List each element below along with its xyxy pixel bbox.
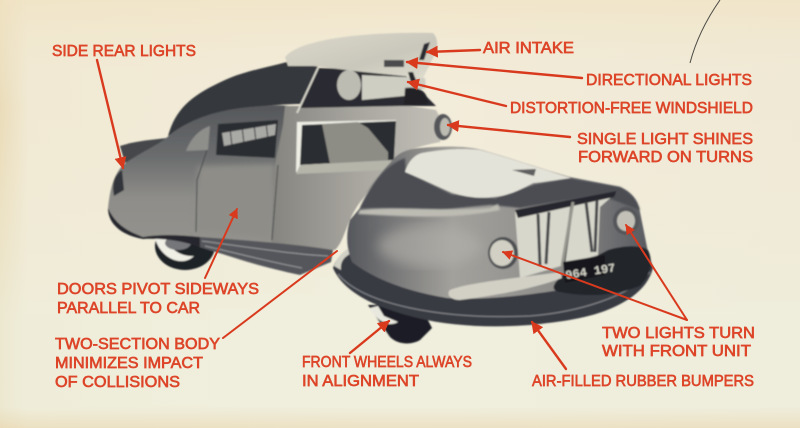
- hood ornament: [512, 169, 536, 176]
- label: front wheels: IN ALIGNMENT: [302, 373, 420, 390]
- front dark shoulder: [360, 158, 640, 210]
- white hood panel: [405, 149, 571, 198]
- arrow: left lamp: [503, 252, 687, 320]
- dark rear roof: [168, 62, 318, 136]
- label: two-section body: OF COLLISIONS: [55, 374, 180, 391]
- line: two-section body: [223, 251, 337, 338]
- label: side rear lights: SIDE REAR LIGHTS: [52, 43, 196, 60]
- label: front wheels: [302, 354, 472, 390]
- arrow: air intake: [427, 50, 480, 52]
- label: air intake: AIR INTAKE: [483, 40, 574, 57]
- licence plate: 964 197: [564, 261, 616, 283]
- rear body section: [108, 105, 335, 274]
- label: two lights: WITH FRONT UNIT: [602, 343, 752, 360]
- label: doors pivot: [57, 281, 259, 317]
- front unit body: [347, 147, 648, 299]
- rear wheel: [155, 222, 215, 270]
- arrow: right lamp: [626, 225, 687, 320]
- left front lamp: [488, 237, 518, 269]
- windshield opening with passenger: [297, 68, 436, 113]
- canopy details: [384, 42, 430, 86]
- right front lamp: [613, 207, 639, 235]
- thin pen line at top right: [690, 0, 720, 63]
- arrow: rubber bumpers: [532, 322, 566, 369]
- soft body sheen: [378, 226, 482, 266]
- chrome left end of skirt: [334, 248, 350, 270]
- arrow: side rear lights: [97, 60, 123, 168]
- label: doors pivot: PARALLEL TO CAR: [57, 300, 200, 317]
- label: directional lights: DIRECTIONAL LIGHTS: [586, 72, 752, 89]
- white canopy: [285, 33, 437, 78]
- mid body section: [271, 106, 446, 250]
- grille opening: [515, 191, 617, 278]
- bumper ribs: [338, 272, 650, 317]
- illustration: two-section car: [108, 33, 653, 343]
- label: single light: SINGLE LIGHT SHINES: [577, 131, 753, 148]
- band ribs: [202, 241, 328, 268]
- rear fin: [120, 138, 167, 163]
- front wheel: [368, 305, 432, 343]
- single headlight: [434, 114, 452, 140]
- front unit skirt: [333, 226, 653, 326]
- chrome shoulder line: [358, 204, 500, 216]
- chrome bumper bar: [448, 272, 562, 300]
- arrow: front wheels: [350, 321, 389, 353]
- label: two lights: [602, 325, 755, 360]
- label: doors pivot: DOORS PIVOT SIDEWAYS: [57, 281, 259, 298]
- arrow: windshield: [408, 82, 506, 106]
- rear window group: [186, 120, 278, 158]
- arrow: directional lights: [407, 62, 582, 78]
- label: single light: FORWARD ON TURNS: [578, 149, 753, 166]
- label: two-section body: TWO-SECTION BODY: [55, 336, 220, 353]
- front side window with driver: [296, 120, 396, 174]
- label: front wheels: FRONT WHEELS ALWAYS: [302, 354, 472, 371]
- arrow: single light: [448, 125, 570, 137]
- ribbed side band: [200, 237, 333, 275]
- label: two-section body: [55, 336, 220, 391]
- arrows: [97, 50, 687, 369]
- rear tail light: [113, 170, 124, 196]
- arrow: doors pivot: [205, 209, 237, 278]
- label: two lights: TWO LIGHTS TURN: [602, 325, 755, 342]
- label: two-section body: MINIMIZES IMPACT: [55, 355, 204, 372]
- black rear valance: [108, 208, 200, 247]
- rear door panel: [196, 164, 275, 240]
- label: single light: [577, 131, 753, 166]
- door seams: [196, 150, 278, 240]
- label: rubber bumpers: AIR-FILLED RUBBER BUMPERS: [532, 373, 754, 390]
- label: windshield: DISTORTION-FREE WINDSHIELD: [510, 100, 753, 117]
- dark lower valance: [554, 246, 651, 295]
